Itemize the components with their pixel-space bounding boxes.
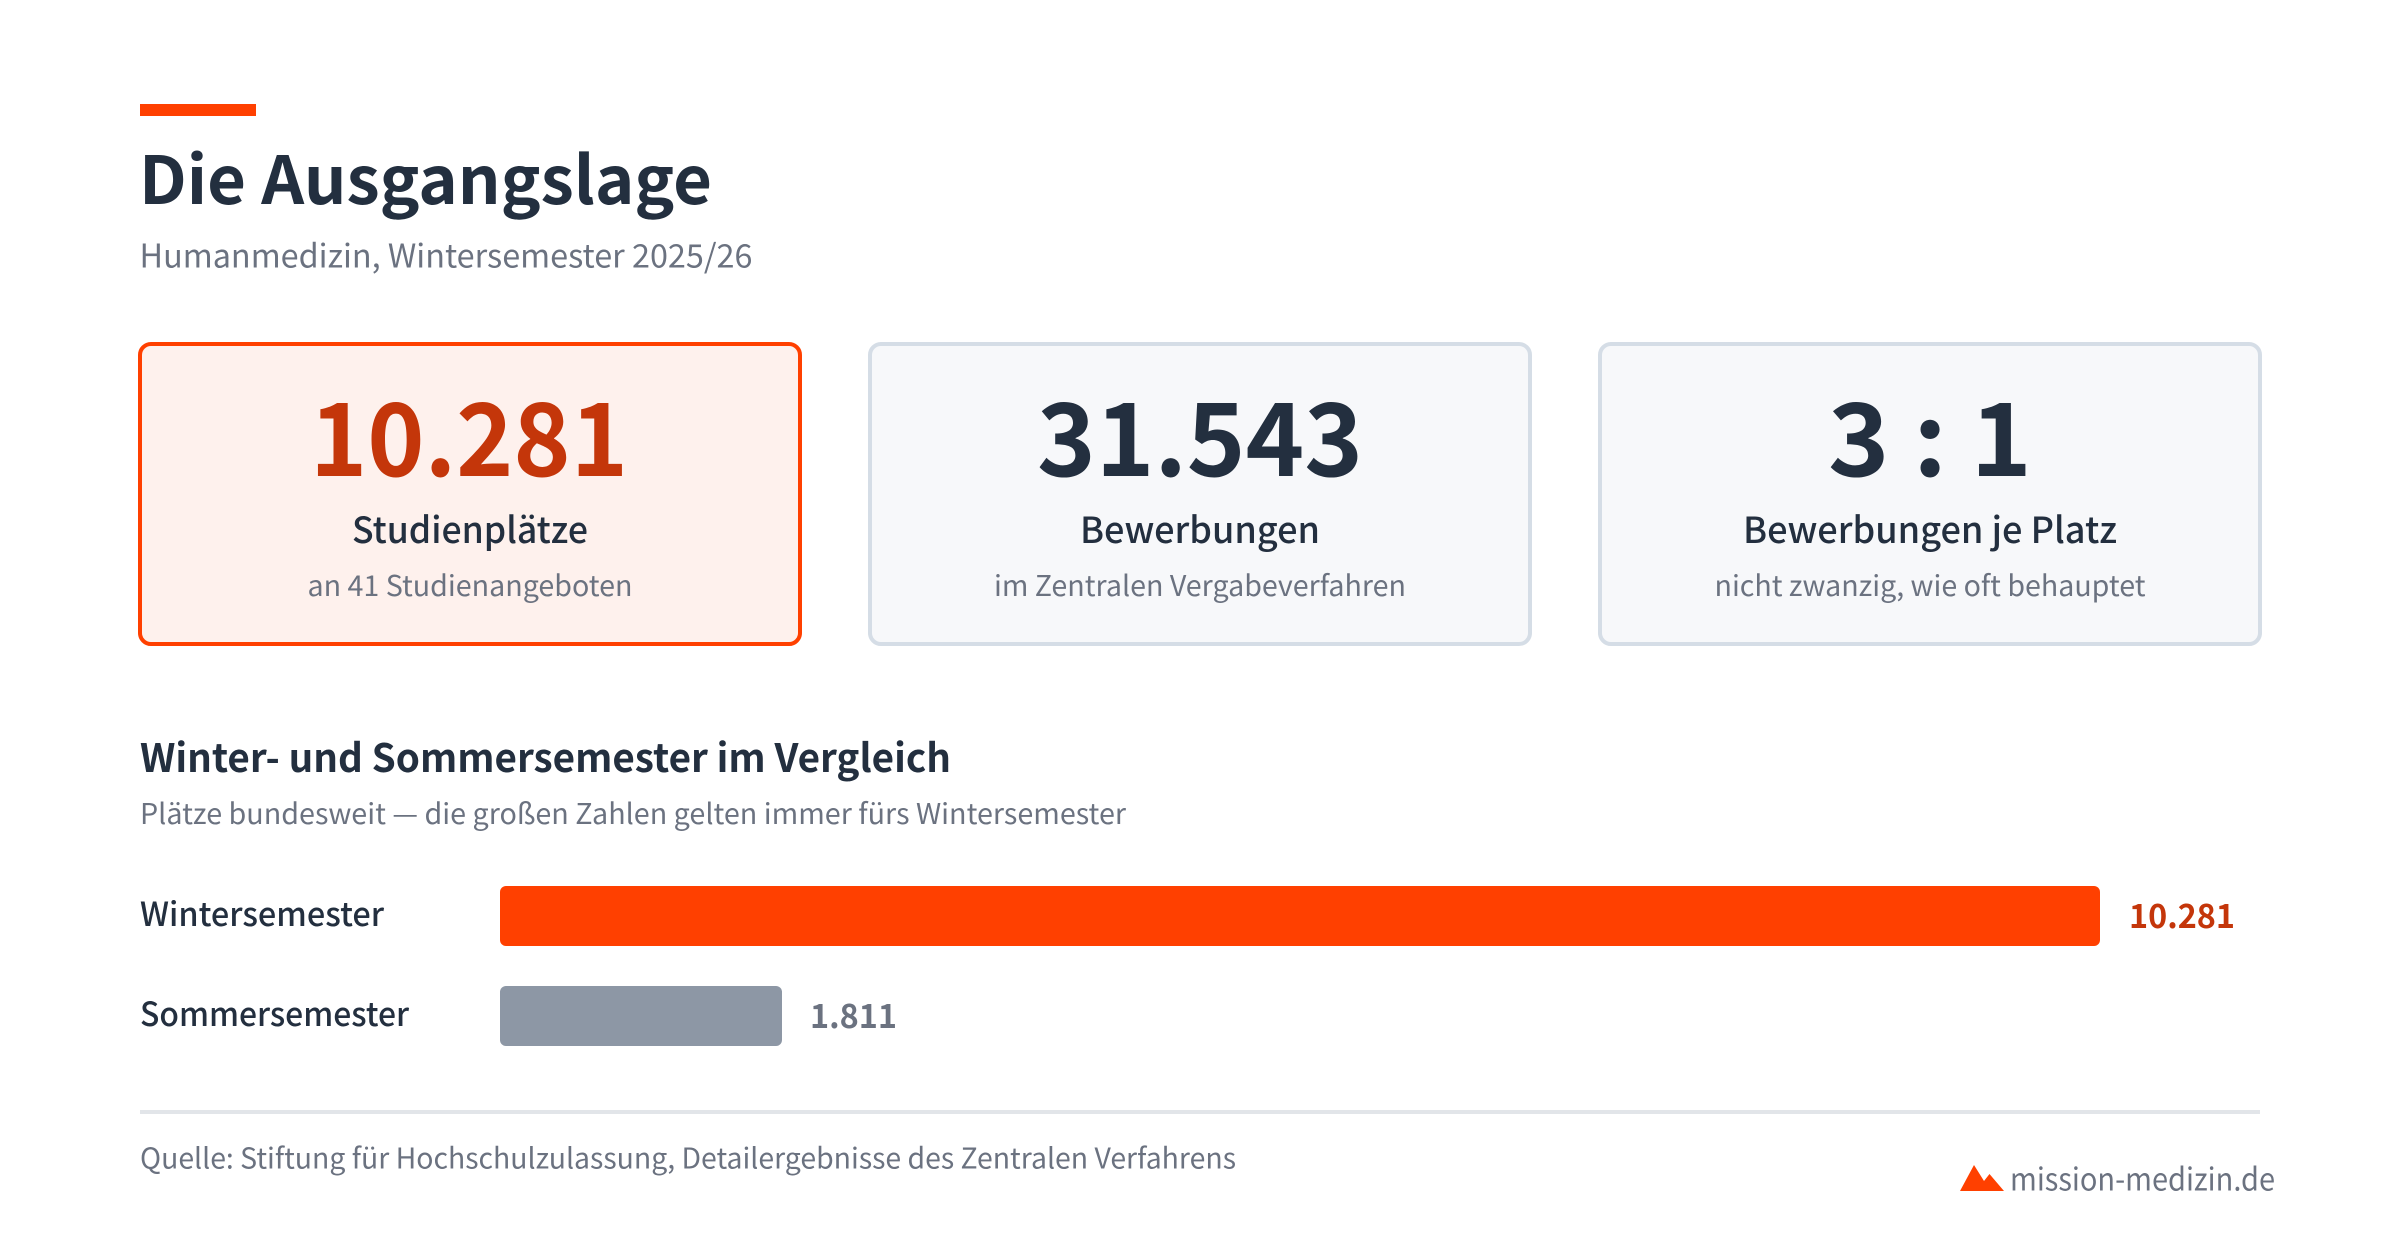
- section heading: Winter- und Sommersemester im Vergleich: [140, 728, 951, 784]
- note: an 41 Studienangeboten: an 41 Studienangeboten: [308, 564, 632, 605]
- label: Studienplätze: Studienplätze: [352, 502, 588, 554]
- row: Sommersemester: 1.811: [810, 990, 897, 1038]
- title: Die Ausgangslage: [139, 128, 712, 224]
- row: Wintersemester: Wintersemester: [140, 888, 384, 936]
- note: nicht zwanzig: nicht zwanzig, wie oft behauptet: [1714, 564, 2146, 605]
- number: 31.543: 31.543: [1037, 360, 1363, 506]
- panel: Studienplätze: [140, 344, 800, 644]
- number: 3 : 1: 3 : 1: [1828, 360, 2032, 506]
- panel: Bewerbungen: [870, 344, 1530, 644]
- logo: [1960, 1154, 2275, 1200]
- number: 10.281: 10.281: [310, 360, 628, 506]
- row: Wintersemester: [140, 886, 2235, 946]
- source note: Quelle: Stiftung für Hochschulzulassung, Detailergebnisse des Zentralen Verfahrens: [140, 1136, 1236, 1178]
- bar chart: [140, 886, 2235, 1046]
- row: Wintersemester: 10.281: [2129, 890, 2235, 938]
- section subheading: Plätze bundesweit — die großen Zahlen gelten immer fürs Wintersemester: [140, 792, 1127, 833]
- row: Sommersemester: Sommersemester: [140, 988, 409, 1036]
- note: im Zentralen Vergabeverfahren: im Zentralen Vergabeverfahren: [994, 564, 1406, 605]
- subtitle: Humanmedizin, Wintersemester 2025/26: [140, 230, 752, 278]
- accent bar: [140, 104, 256, 116]
- panel: Bewerbungen je Platz: [1600, 344, 2260, 644]
- logo text: mission-medizin.de: [2010, 1154, 2275, 1200]
- icon: mountains: [1960, 1165, 2004, 1191]
- row: Sommersemester: [140, 986, 897, 1046]
- label: Bewerbungen: Bewerbungen: [1080, 502, 1320, 554]
- label: Bewerbungen je Platz: Bewerbungen je Platz: [1743, 502, 2117, 554]
